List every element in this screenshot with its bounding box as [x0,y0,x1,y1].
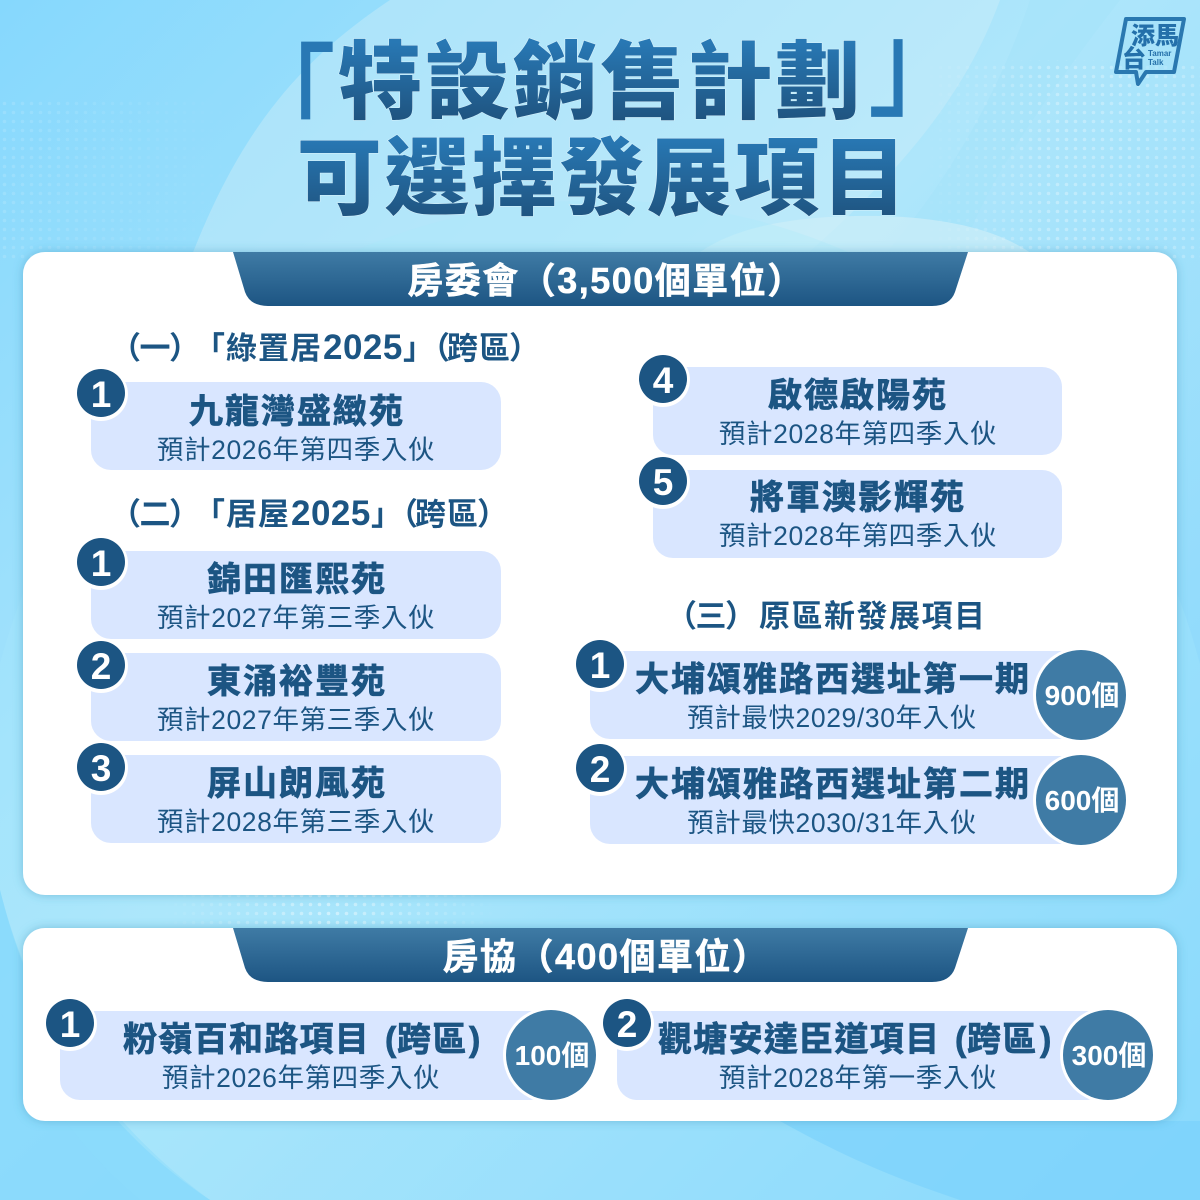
card: 觀塘安達臣道項目: 2 [617,1004,637,1045]
icon: Tamar Talk logo [1116,16,1184,84]
card: 大埔頌雅路西選址第二期: 預計最快2030/31年入伙 [687,808,977,838]
card: 將軍澳影輝苑 [636,455,1062,558]
heading: 綠置居2025: （ [419,331,451,366]
icon: Tamar Talk logo: 台 [1122,39,1146,74]
card: 大埔頌雅路西選址第二期: 600個 [1045,785,1119,816]
card: 大埔頌雅路西選址第二期 [573,742,1129,848]
card: 觀塘安達臣道項目: 300個 [1072,1040,1146,1071]
card: 大埔頌雅路西選址第一期: 預計最快2029/30年入伙 [687,703,977,733]
card: 大埔頌雅路西選址第一期 [573,638,1129,743]
card: 九龍灣盛緻苑: 1 [91,374,111,415]
heading: 居屋2025: （ [387,497,419,532]
title: 可選擇發展項目 [297,132,909,227]
card: 觀塘安達臣道項目: 觀塘安達臣道項目 [658,1021,940,1059]
icon: Tamar Talk logo: 添馬 [1131,16,1179,51]
title: 特設銷售計劃 [337,36,863,131]
panel: 房協 [23,928,1177,1121]
card: 啟德啟陽苑: 預計2028年第四季入伙 [719,419,997,449]
title: 「 [238,4,336,179]
card: 錦田匯熙苑: 錦田匯熙苑 [207,561,387,599]
card: 粉嶺百和路項目: ( [385,1021,398,1059]
banner: 房協 heading: 房協（400個單位） [442,936,770,977]
icon: Tamar Talk logo: Tamar [1148,49,1171,58]
card: 啟德啟陽苑 [636,353,1062,455]
card: 大埔頌雅路西選址第二期: 2 [590,749,610,790]
card: 東涌裕豐苑: 預計2027年第三季入伙 [157,705,435,735]
card: 大埔頌雅路西選址第一期: 900個 [1045,680,1119,711]
banner: 房委會 heading [233,252,968,306]
title [238,0,966,227]
heading: 綠置居2025: 跨區 [447,331,511,366]
heading: 居屋2025: （二） [110,497,198,532]
card: 東涌裕豐苑 [74,639,501,741]
card: 屏山朗風苑 [74,741,501,843]
card: 將軍澳影輝苑: 5 [653,462,673,503]
heading: 綠置居2025: （一） [110,331,198,366]
banner: 房委會 heading: 房委會（3,500個單位） [407,260,805,301]
heading: 原區新發展項目: （三） [666,599,754,634]
heading: 綠置居2025: ） [509,331,541,366]
card: 屏山朗風苑: 3 [91,748,111,789]
card: 大埔頌雅路西選址第一期: 1 [590,645,610,686]
panel: 房委會 [23,252,1177,895]
card: 九龍灣盛緻苑 [74,367,501,470]
card: 粉嶺百和路項目: ) [469,1021,482,1059]
card: 錦田匯熙苑: 預計2027年第三季入伙 [157,603,435,633]
card: 啟德啟陽苑: 4 [653,360,674,401]
card: 觀塘安達臣道項目: ) [1040,1021,1053,1059]
card: 大埔頌雅路西選址第二期: 大埔頌雅路西選址第二期 [635,766,1031,804]
heading: 綠置居2025: 2025 [323,328,403,367]
heading: 居屋2025: 居屋 [226,497,290,532]
card: 大埔頌雅路西選址第一期: 大埔頌雅路西選址第一期 [635,661,1031,699]
heading: 居屋2025: 2025 [291,494,371,533]
card: 粉嶺百和路項目: 預計2026年第四季入伙 [162,1063,440,1093]
card: 將軍澳影輝苑: 預計2028年第四季入伙 [719,521,997,551]
card: 觀塘安達臣道項目 [600,997,1156,1103]
heading: 綠置居2025: 綠置居 [226,331,322,366]
card: 粉嶺百和路項目: 跨區 [397,1021,468,1059]
card: 錦田匯熙苑: 1 [91,543,111,584]
card: 九龍灣盛緻苑: 九龍灣盛緻苑 [189,393,405,431]
card: 東涌裕豐苑: 2 [91,646,111,687]
card: 粉嶺百和路項目: 1 [60,1004,80,1045]
icon: Tamar Talk logo: Talk [1148,58,1164,67]
heading: 居屋2025: 跨區 [415,497,479,532]
card: 屏山朗風苑: 預計2028年第三季入伙 [157,807,435,837]
card: 觀塘安達臣道項目: 預計2028年第一季入伙 [719,1063,997,1093]
card: 觀塘安達臣道項目: 跨區 [967,1021,1038,1059]
heading: 居屋2025: 「 [194,497,226,532]
card: 九龍灣盛緻苑: 預計2026年第四季入伙 [157,435,435,465]
heading: 居屋2025: 」 [371,497,403,532]
heading: 綠置居2025: 」 [403,331,435,366]
card: 東涌裕豐苑: 東涌裕豐苑 [207,663,387,701]
card: 屏山朗風苑: 屏山朗風苑 [207,765,387,803]
card: 粉嶺百和路項目 [43,997,599,1103]
heading: 綠置居2025: 「 [194,331,226,366]
card: 將軍澳影輝苑: 將軍澳影輝苑 [750,479,966,517]
card: 啟德啟陽苑: 啟德啟陽苑 [768,377,948,415]
heading: 居屋2025: ） [477,497,509,532]
card: 觀塘安達臣道項目: ( [955,1021,968,1059]
card: 錦田匯熙苑 [74,536,501,639]
banner: 房協 heading [233,928,968,982]
card: 粉嶺百和路項目: 粉嶺百和路項目 [123,1021,370,1059]
heading: 原區新發展項目: 原區新發展項目 [759,599,986,634]
card: 粉嶺百和路項目: 100個 [515,1040,589,1071]
